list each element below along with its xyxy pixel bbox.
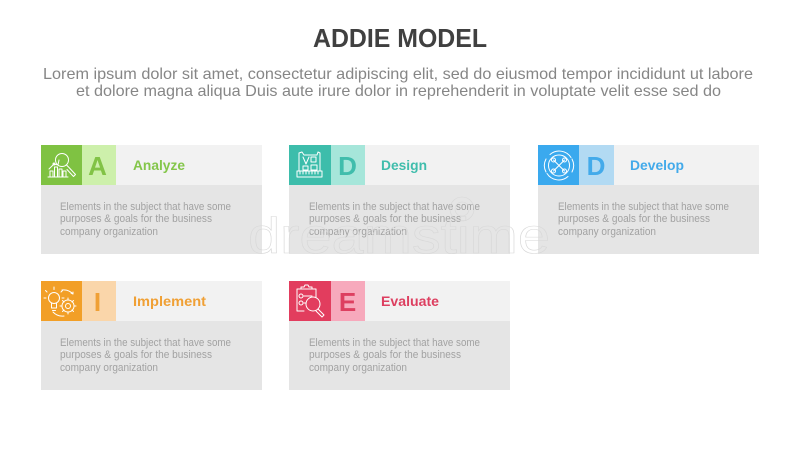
- label: Evaluate: [381, 293, 439, 309]
- description: [558, 201, 729, 238]
- description: purposes & goals for the business: [309, 213, 461, 225]
- watermark: dreamstime: [248, 208, 550, 264]
- letter E: E: [339, 287, 356, 317]
- description: company organization: [60, 226, 158, 238]
- icon: clipboard and magnifier: [297, 285, 324, 317]
- description: purposes & goals for the business: [309, 349, 461, 361]
- description: purposes & goals for the business: [558, 213, 710, 225]
- panel: analyze: [41, 145, 262, 254]
- description: purposes & goals for the business: [60, 349, 212, 361]
- icon: analysis chart and magnifier: [48, 154, 76, 177]
- label: Analyze: [133, 157, 185, 173]
- description: [309, 201, 480, 238]
- description: Elements in the subject that have some: [60, 337, 231, 349]
- letter D: D: [587, 151, 605, 181]
- panel: develop: [538, 145, 759, 254]
- icon: crossed tools in circular arrows: [544, 151, 574, 180]
- title: ADDIE MODEL: [313, 23, 487, 53]
- subtitle: [43, 66, 753, 100]
- label: Develop: [630, 157, 684, 173]
- description: [309, 337, 480, 374]
- panel: implement: [41, 281, 262, 390]
- description: [60, 337, 231, 374]
- subtitle: et dolore magna aliqua Duis aute irure dolor in reprehenderit in voluptate velit esse sed do: [76, 83, 721, 100]
- letter I: I: [94, 287, 101, 317]
- description: Elements in the subject that have some: [558, 201, 729, 213]
- description: [60, 201, 231, 238]
- description: company organization: [558, 226, 656, 238]
- label: Implement: [133, 293, 206, 309]
- panel: design: [289, 145, 510, 254]
- description: Elements in the subject that have some: [309, 201, 480, 213]
- label: Design: [381, 157, 427, 173]
- description: Elements in the subject that have some: [309, 337, 480, 349]
- description: purposes & goals for the business: [60, 213, 212, 225]
- description: company organization: [309, 226, 407, 238]
- description: company organization: [309, 362, 407, 374]
- description: Elements in the subject that have some: [60, 201, 231, 213]
- description: company organization: [60, 362, 158, 374]
- icon: blueprint and ruler: [297, 152, 322, 177]
- letter A: A: [88, 151, 107, 181]
- subtitle: Lorem ipsum dolor sit amet, consectetur adipiscing elit, sed do eiusmod tempor incididunt ut labore: [43, 66, 753, 83]
- letter D: D: [338, 151, 357, 181]
- icon: light bulb and gear: [44, 287, 76, 316]
- panel: evaluate: [289, 281, 510, 390]
